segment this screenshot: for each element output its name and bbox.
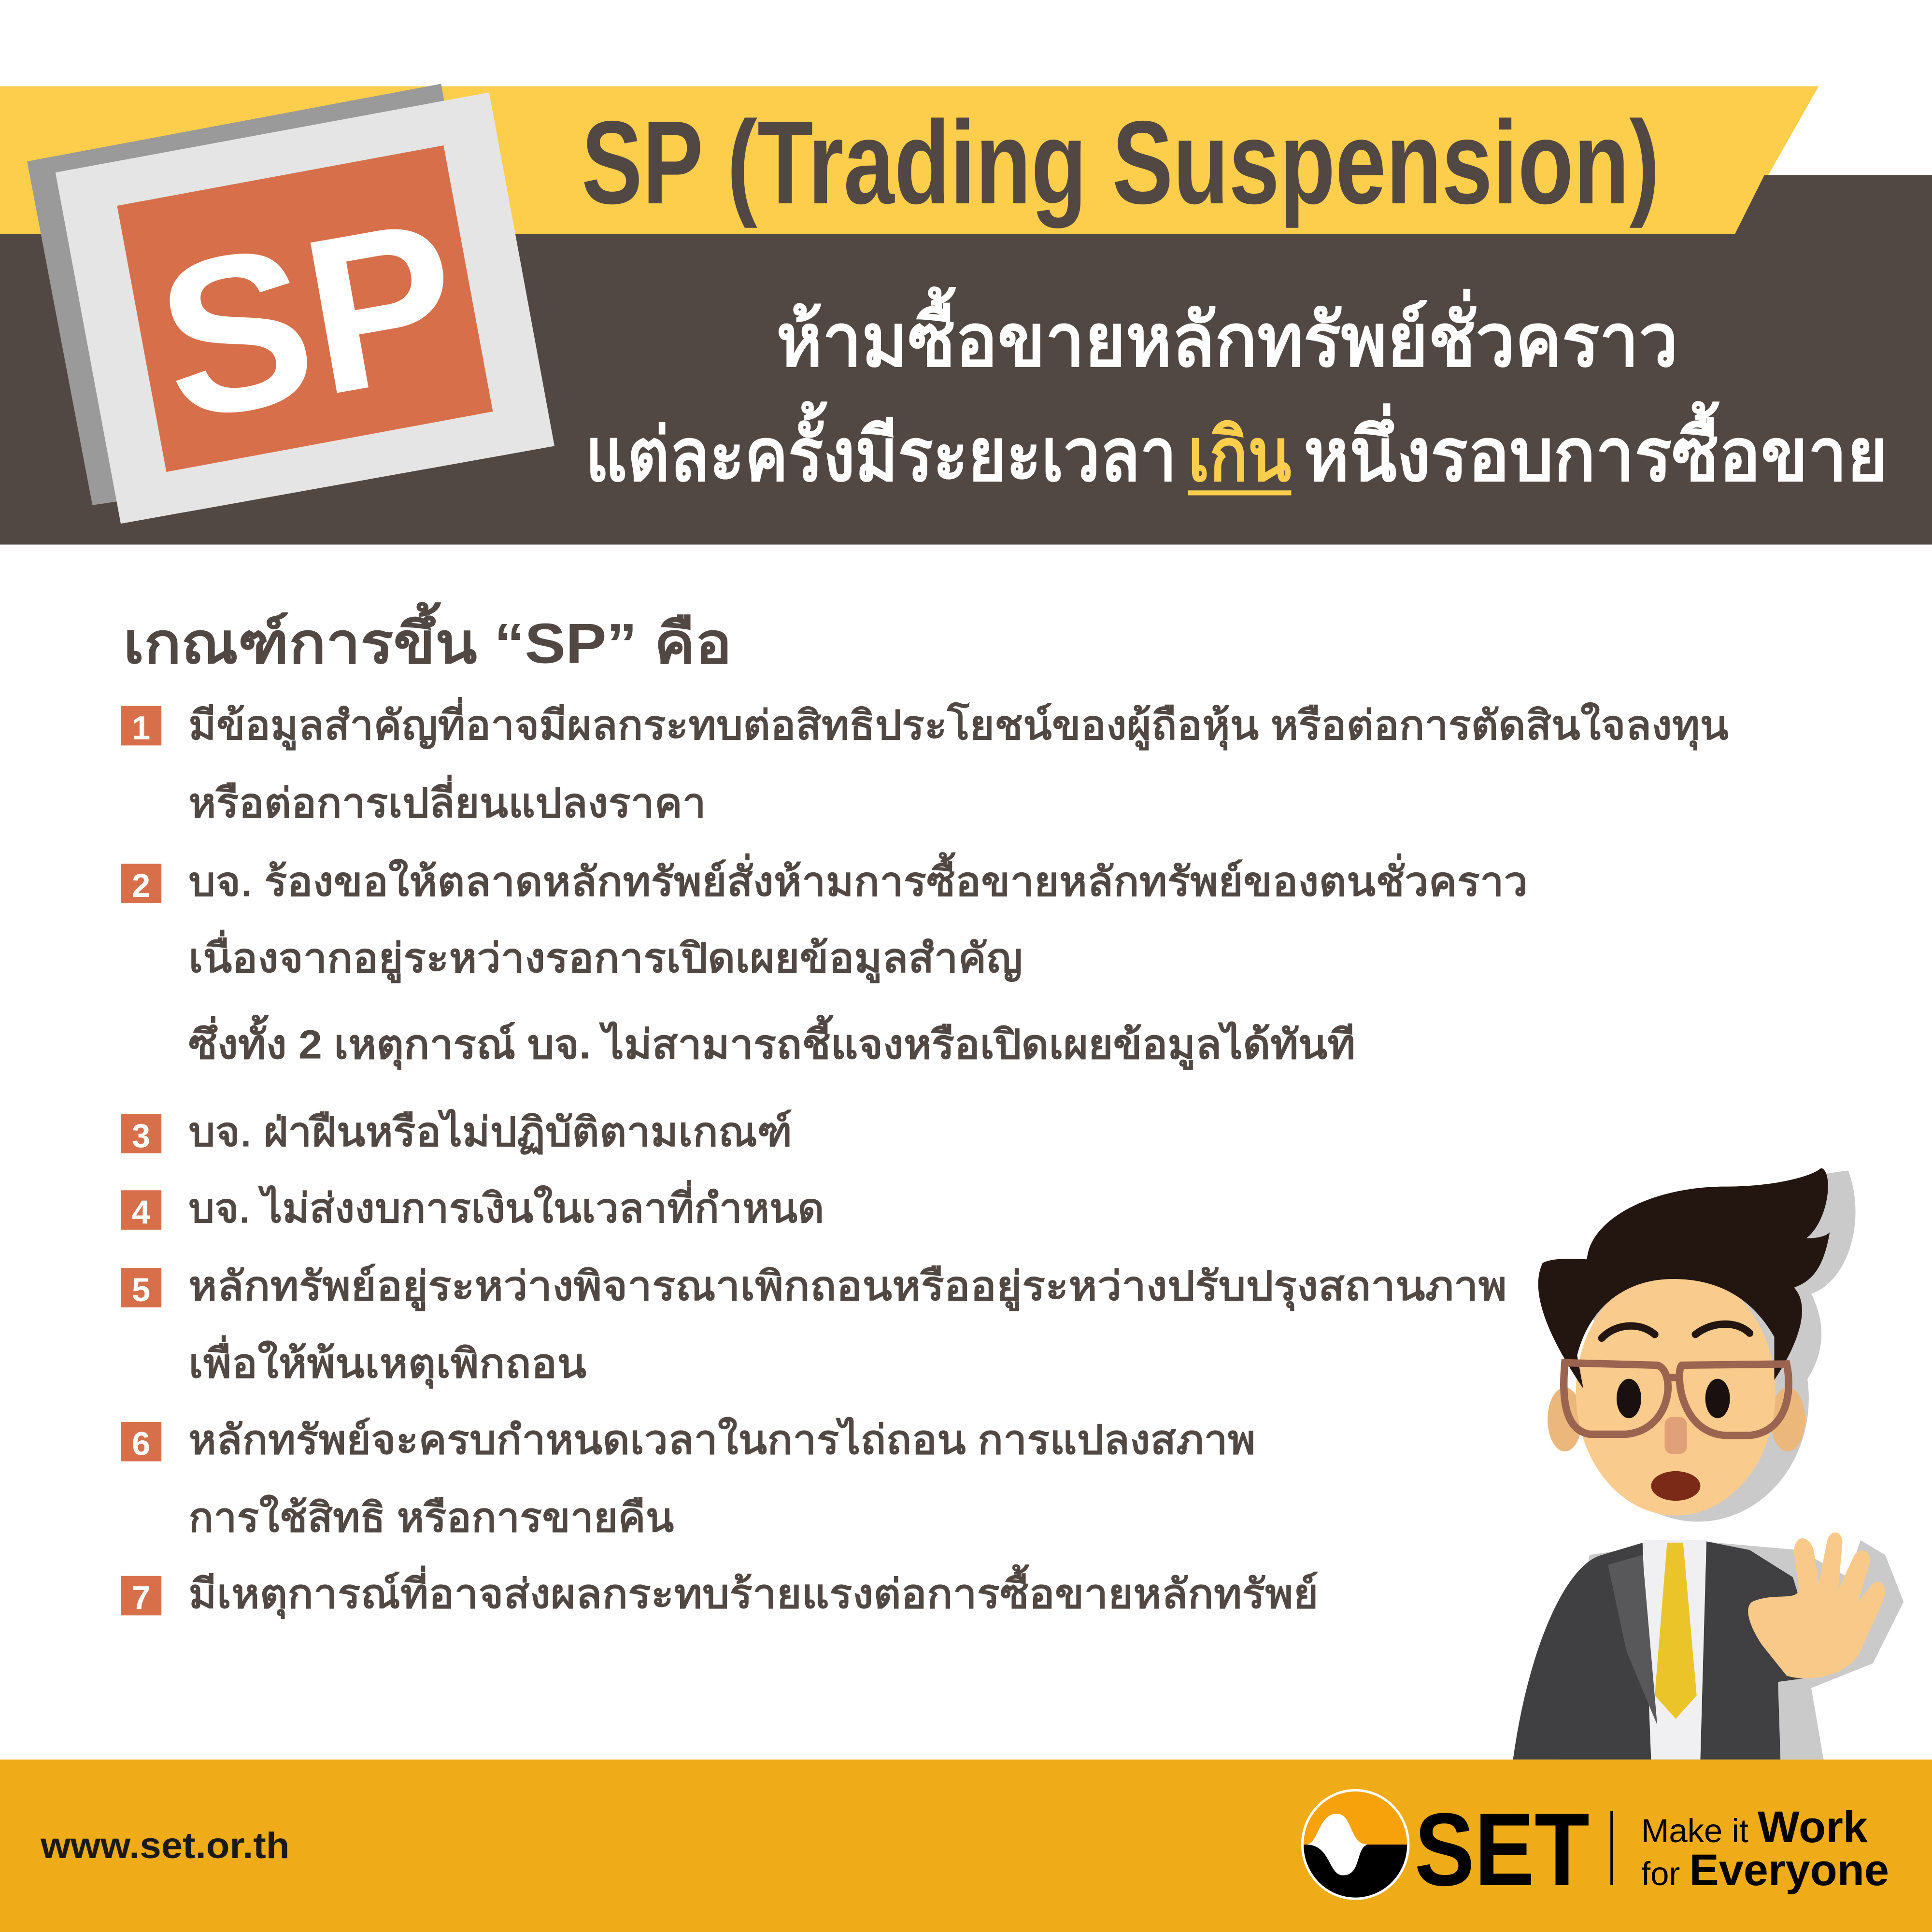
logo: SET xyxy=(1301,1789,1889,1907)
shirt xyxy=(1643,1540,1706,1760)
footer bar xyxy=(0,1760,1932,1932)
eyebrows xyxy=(1602,1326,1655,1338)
header dark band xyxy=(0,175,1932,545)
item 1: 1 xyxy=(132,710,150,747)
item 4: บจ. ไม่ส่งงบการเงินในเวลาที่กำหนด xyxy=(188,1180,824,1231)
header yellow band xyxy=(0,86,1818,234)
item 6: การใช้สิทธิ หรือการขายคืน xyxy=(188,1495,674,1540)
face xyxy=(1576,1269,1776,1516)
subtitle line 2 xyxy=(585,401,1888,497)
glasses xyxy=(1564,1363,1789,1435)
item 4: 4 xyxy=(132,1193,150,1231)
item 1: หรือต่อการเปลี่ยนแปลงราคา xyxy=(188,775,706,825)
footer url: www.set.or.th xyxy=(40,1825,289,1866)
logo: SET: SET xyxy=(1415,1792,1590,1907)
item 5: เพื่อให้พ้นเหตุเพิกถอน xyxy=(188,1335,586,1389)
logo: SET: for Everyone xyxy=(1641,1846,1889,1895)
item 7: มีเหตุการณ์ที่อาจส่งผลกระทบร้ายแรงต่อการซื้อขายหลักทรัพย์ xyxy=(188,1565,1319,1619)
list xyxy=(121,697,1729,1619)
item 2: บจ. ร้องขอให้ตลาดหลักทรัพย์สั่งห้ามการซื้อขายหลักทรัพย์ของตนชั่วคราว xyxy=(188,853,1528,905)
ears xyxy=(1548,1387,1582,1451)
hair xyxy=(1538,1168,1830,1389)
item 7: 7 xyxy=(132,1579,150,1617)
item 5: 5 xyxy=(132,1271,150,1308)
hand xyxy=(1748,1533,1885,1678)
eyes xyxy=(1617,1379,1641,1418)
item 6: หลักทรัพย์จะครบกำหนดเวลาในการไถ่ถอน การแปลงสภาพ xyxy=(188,1417,1255,1463)
icon: SP card xyxy=(27,84,554,524)
item 2: ซึ่งทั้ง 2 เหตุการณ์ บจ. ไม่สามารถชี้แจงหรือเปิดเผยข้อมูลได้ทันที xyxy=(188,1014,1355,1070)
shadow xyxy=(1555,1170,1904,1760)
item 2 xyxy=(121,853,1528,1070)
character xyxy=(1513,1168,1904,1760)
icon: SP card: SP xyxy=(142,172,476,468)
heading: เกณฑ์การขึ้น “SP” คือ xyxy=(123,602,732,675)
item 3: บจ. ฝ่าฝืนหรือไม่ปฏิบัติตามเกณฑ์ xyxy=(188,1109,792,1154)
item 6: 6 xyxy=(132,1425,150,1463)
subtitle line 2: แต่ละครั้งมีระยะเวลา xyxy=(585,401,1177,497)
item 2: เนื่องจากอยู่ระหว่างรอการเปิดเผยข้อมูลสำคัญ xyxy=(188,930,1023,983)
item 5 xyxy=(121,1263,1507,1389)
suit xyxy=(1513,1540,1824,1760)
logo: SET: Make it Work xyxy=(1641,1803,1868,1852)
item 6 xyxy=(121,1417,1255,1540)
item 5: หลักทรัพย์อยู่ระหว่างพิจารณาเพิกถอนหรืออยู่ระหว่างปรับปรุงสถานภาพ xyxy=(188,1263,1507,1311)
nose xyxy=(1664,1417,1687,1454)
item 3: 3 xyxy=(132,1117,150,1154)
item 1 xyxy=(121,697,1729,825)
subtitle line 2: หนึ่งรอบการซื้อขาย xyxy=(1304,401,1888,497)
subtitle line 1: ห้ามซื้อขายหลักทรัพย์ชั่วคราว xyxy=(776,286,1678,382)
item 1: มีข้อมูลสำคัญที่อาจมีผลกระทบต่อสิทธิประโยชน์ของผู้ถือหุ้น หรือต่อการตัดสินใจลงทุน xyxy=(188,697,1729,751)
item 2: 2 xyxy=(132,867,150,904)
mouth xyxy=(1651,1471,1700,1501)
tie xyxy=(1655,1543,1697,1719)
subtitle line 2: เกิน xyxy=(1188,414,1291,497)
